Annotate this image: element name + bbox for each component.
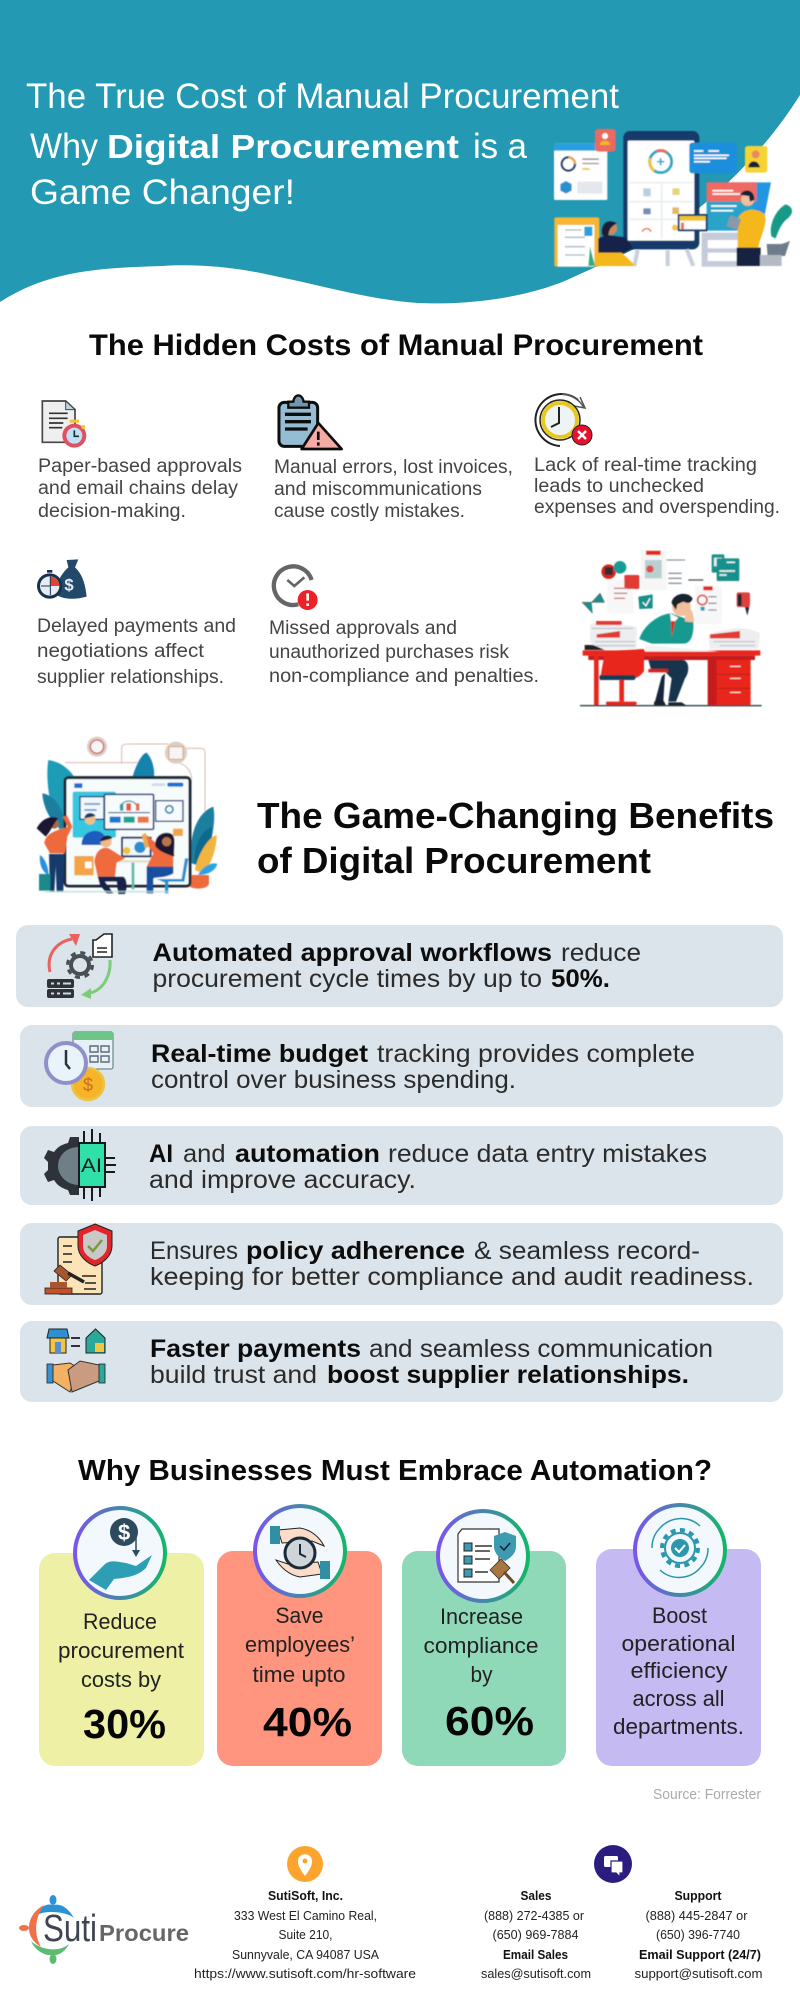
icon: hand and dollar — [75, 1508, 165, 1598]
item text: lack of tracking: leads to unchecked — [534, 476, 704, 497]
icon: clock calendar coin — [46, 1032, 113, 1100]
card: save time: time upto — [252, 1662, 346, 1687]
panel: policy adherence — [20, 1223, 783, 1305]
panel: real-time budget: tracking provides complete — [377, 1040, 695, 1068]
item text: missed approvals — [269, 618, 539, 687]
icon: clock with error — [535, 394, 592, 446]
title: The True Cost of Manual Procurement — [26, 77, 619, 116]
panel: policy adherence: & seamless record- — [474, 1237, 700, 1265]
title — [26, 77, 619, 212]
support contact: (650) 396-7740 — [656, 1927, 740, 1942]
heading: benefits: The Game-Changing Benefits — [257, 795, 774, 836]
address block: Suite 210, — [278, 1927, 332, 1942]
item text: delayed payments: negotiations affect — [37, 641, 205, 662]
card: reduce costs: procurement — [58, 1638, 184, 1663]
icon: document and stopwatch — [42, 401, 86, 448]
item text: missed approvals: non-compliance and penalties. — [269, 666, 539, 687]
title: Why — [30, 127, 98, 166]
item text: manual errors: and miscommunications — [274, 479, 482, 500]
icon: workflow gear — [47, 934, 112, 999]
logo: SutiProcure: Suti — [43, 1908, 97, 1950]
panel: faster payments: and seamless communication — [369, 1335, 713, 1363]
sales contact: (650) 969-7884 — [492, 1927, 578, 1942]
icon: hand and dollar: $ — [118, 1520, 130, 1545]
panel: AI and automation: and improve accuracy. — [149, 1166, 416, 1194]
panel: automated approval workflows: Automated approval workflows — [152, 939, 552, 967]
item text: missed approvals: unauthorized purchases risk — [269, 642, 509, 663]
panel: automated approval workflows — [16, 925, 783, 1007]
item text: delayed payments — [37, 616, 236, 688]
panel: faster payments: boost supplier relationships. — [327, 1361, 689, 1389]
card: boost efficiency — [596, 1505, 761, 1766]
panel: AI and automation: reduce data entry mistakes — [388, 1140, 707, 1168]
icon: location pin — [287, 1846, 323, 1882]
panel: policy adherence: keeping for better compliance and audit readiness. — [150, 1263, 754, 1291]
address block: SutiSoft, Inc. — [268, 1888, 343, 1903]
item text: missed approvals: Missed approvals and — [269, 618, 457, 639]
card: boost efficiency: operational — [622, 1631, 736, 1656]
icon: gear with check — [635, 1505, 725, 1595]
icon: clock with alert — [274, 566, 318, 610]
title: Game Changer! — [30, 173, 295, 212]
heading: why automation: Why Businesses Must Embrace Automation? — [78, 1455, 712, 1487]
icon: stopwatch and money bag — [37, 559, 87, 599]
icon: hands around clock — [255, 1506, 345, 1596]
illustration: team with dashboard — [37, 737, 217, 894]
card: reduce costs — [39, 1508, 204, 1766]
card: save time: 40% — [263, 1699, 352, 1745]
card: boost efficiency: across all — [632, 1686, 724, 1711]
address block: https://www.sutisoft.com/hr-software — [194, 1966, 416, 1981]
panel: AI and automation — [20, 1126, 783, 1205]
sales contact: (888) 272-4385 or — [484, 1908, 585, 1923]
support contact — [634, 1888, 762, 1981]
panel: AI and automation: AI — [149, 1140, 173, 1168]
item text: lack of tracking — [534, 455, 780, 518]
sales contact — [481, 1888, 591, 1981]
logo: SutiProcure — [19, 1895, 189, 1964]
panel: automated approval workflows: 50%. — [551, 965, 610, 993]
card: boost efficiency: departments. — [613, 1714, 744, 1739]
card: increase compliance: compliance — [424, 1633, 538, 1658]
support contact: Email Support (24/7) — [639, 1947, 761, 1962]
item text: manual errors: Manual errors, lost invoices, — [274, 457, 513, 478]
card: increase compliance: Increase — [440, 1604, 523, 1629]
panel: faster payments — [20, 1321, 783, 1402]
panel: AI and automation: automation — [235, 1140, 380, 1168]
heading: benefits: of Digital Procurement — [257, 840, 651, 881]
card: increase compliance: by — [470, 1662, 492, 1687]
panel: faster payments: Faster payments — [150, 1335, 361, 1363]
sales contact: Email Sales — [503, 1947, 568, 1962]
panel: AI and automation: and — [183, 1140, 226, 1168]
source note: Source: Forrester — [653, 1786, 761, 1803]
header wave background — [0, 0, 800, 303]
card: save time — [217, 1506, 382, 1766]
item text: paper-based approvals: decision-making. — [38, 501, 186, 522]
title: is a — [473, 127, 528, 166]
support contact: support@sutisoft.com — [634, 1966, 762, 1981]
support contact: Support — [674, 1888, 722, 1903]
panel: real-time budget — [20, 1025, 783, 1107]
support contact: (888) 445-2847 or — [646, 1908, 748, 1923]
item text: paper-based approvals: and email chains delay — [38, 478, 239, 499]
panel: automated approval workflows: procurement cycle times by up to — [152, 965, 542, 993]
card: reduce costs: costs by — [81, 1667, 161, 1692]
icon: shops and handshake — [47, 1329, 105, 1392]
item text: paper-based approvals: Paper-based approvals — [38, 456, 242, 477]
illustration: digital dashboard team — [554, 129, 792, 267]
icon: clipboard with warning — [279, 395, 342, 449]
panel: real-time budget: control over business spending. — [151, 1066, 516, 1094]
card: increase compliance — [402, 1511, 566, 1766]
item text: paper-based approvals — [38, 456, 242, 522]
panel: real-time budget: Real-time budget — [151, 1040, 369, 1068]
card: reduce costs: Reduce — [83, 1609, 157, 1634]
icon: shield and gavel — [45, 1224, 112, 1294]
icon: stopwatch and money bag: $ — [64, 576, 74, 595]
panel: automated approval workflows: reduce — [561, 939, 641, 967]
heading: hidden costs: The Hidden Costs of Manual Procurement — [89, 329, 703, 362]
card: boost efficiency: efficiency — [630, 1658, 728, 1683]
title: Digital Procurement — [107, 128, 459, 165]
address block: Sunnyvale, CA 94087 USA — [232, 1947, 379, 1962]
item text: manual errors: cause costly mistakes. — [274, 501, 465, 522]
sales contact: Sales — [520, 1888, 552, 1903]
address block: 333 West El Camino Real, — [234, 1908, 377, 1923]
card: boost efficiency: Boost — [652, 1603, 707, 1628]
panel: policy adherence: Ensures — [150, 1237, 238, 1265]
icon: AI gear chip: AI — [81, 1156, 102, 1177]
card: save time: Save — [276, 1603, 324, 1628]
item text: delayed payments: Delayed payments and — [37, 616, 236, 637]
panel: policy adherence: policy adherence — [246, 1237, 465, 1265]
sales contact: sales@sutisoft.com — [481, 1966, 591, 1981]
item text: lack of tracking: expenses and overspending. — [534, 497, 780, 518]
item text: lack of tracking: Lack of real-time tracking — [534, 455, 757, 476]
card: save time: employees’ — [245, 1632, 355, 1657]
item text: manual errors — [274, 457, 513, 522]
heading: benefits — [257, 795, 774, 881]
item text: delayed payments: supplier relationships. — [37, 667, 224, 688]
logo: SutiProcure: Procure — [99, 1920, 189, 1946]
panel: faster payments: build trust and — [150, 1361, 317, 1389]
icon: chat bubbles — [594, 1845, 632, 1883]
icon: checklist shield gavel — [438, 1511, 528, 1601]
icon: AI gear chip — [44, 1129, 116, 1201]
illustration: stressed man at red desk — [580, 550, 762, 706]
card: increase compliance: 60% — [445, 1698, 534, 1744]
card: reduce costs: 30% — [83, 1701, 166, 1747]
icon: clock calendar coin: $ — [83, 1075, 93, 1095]
address block — [194, 1888, 416, 1981]
